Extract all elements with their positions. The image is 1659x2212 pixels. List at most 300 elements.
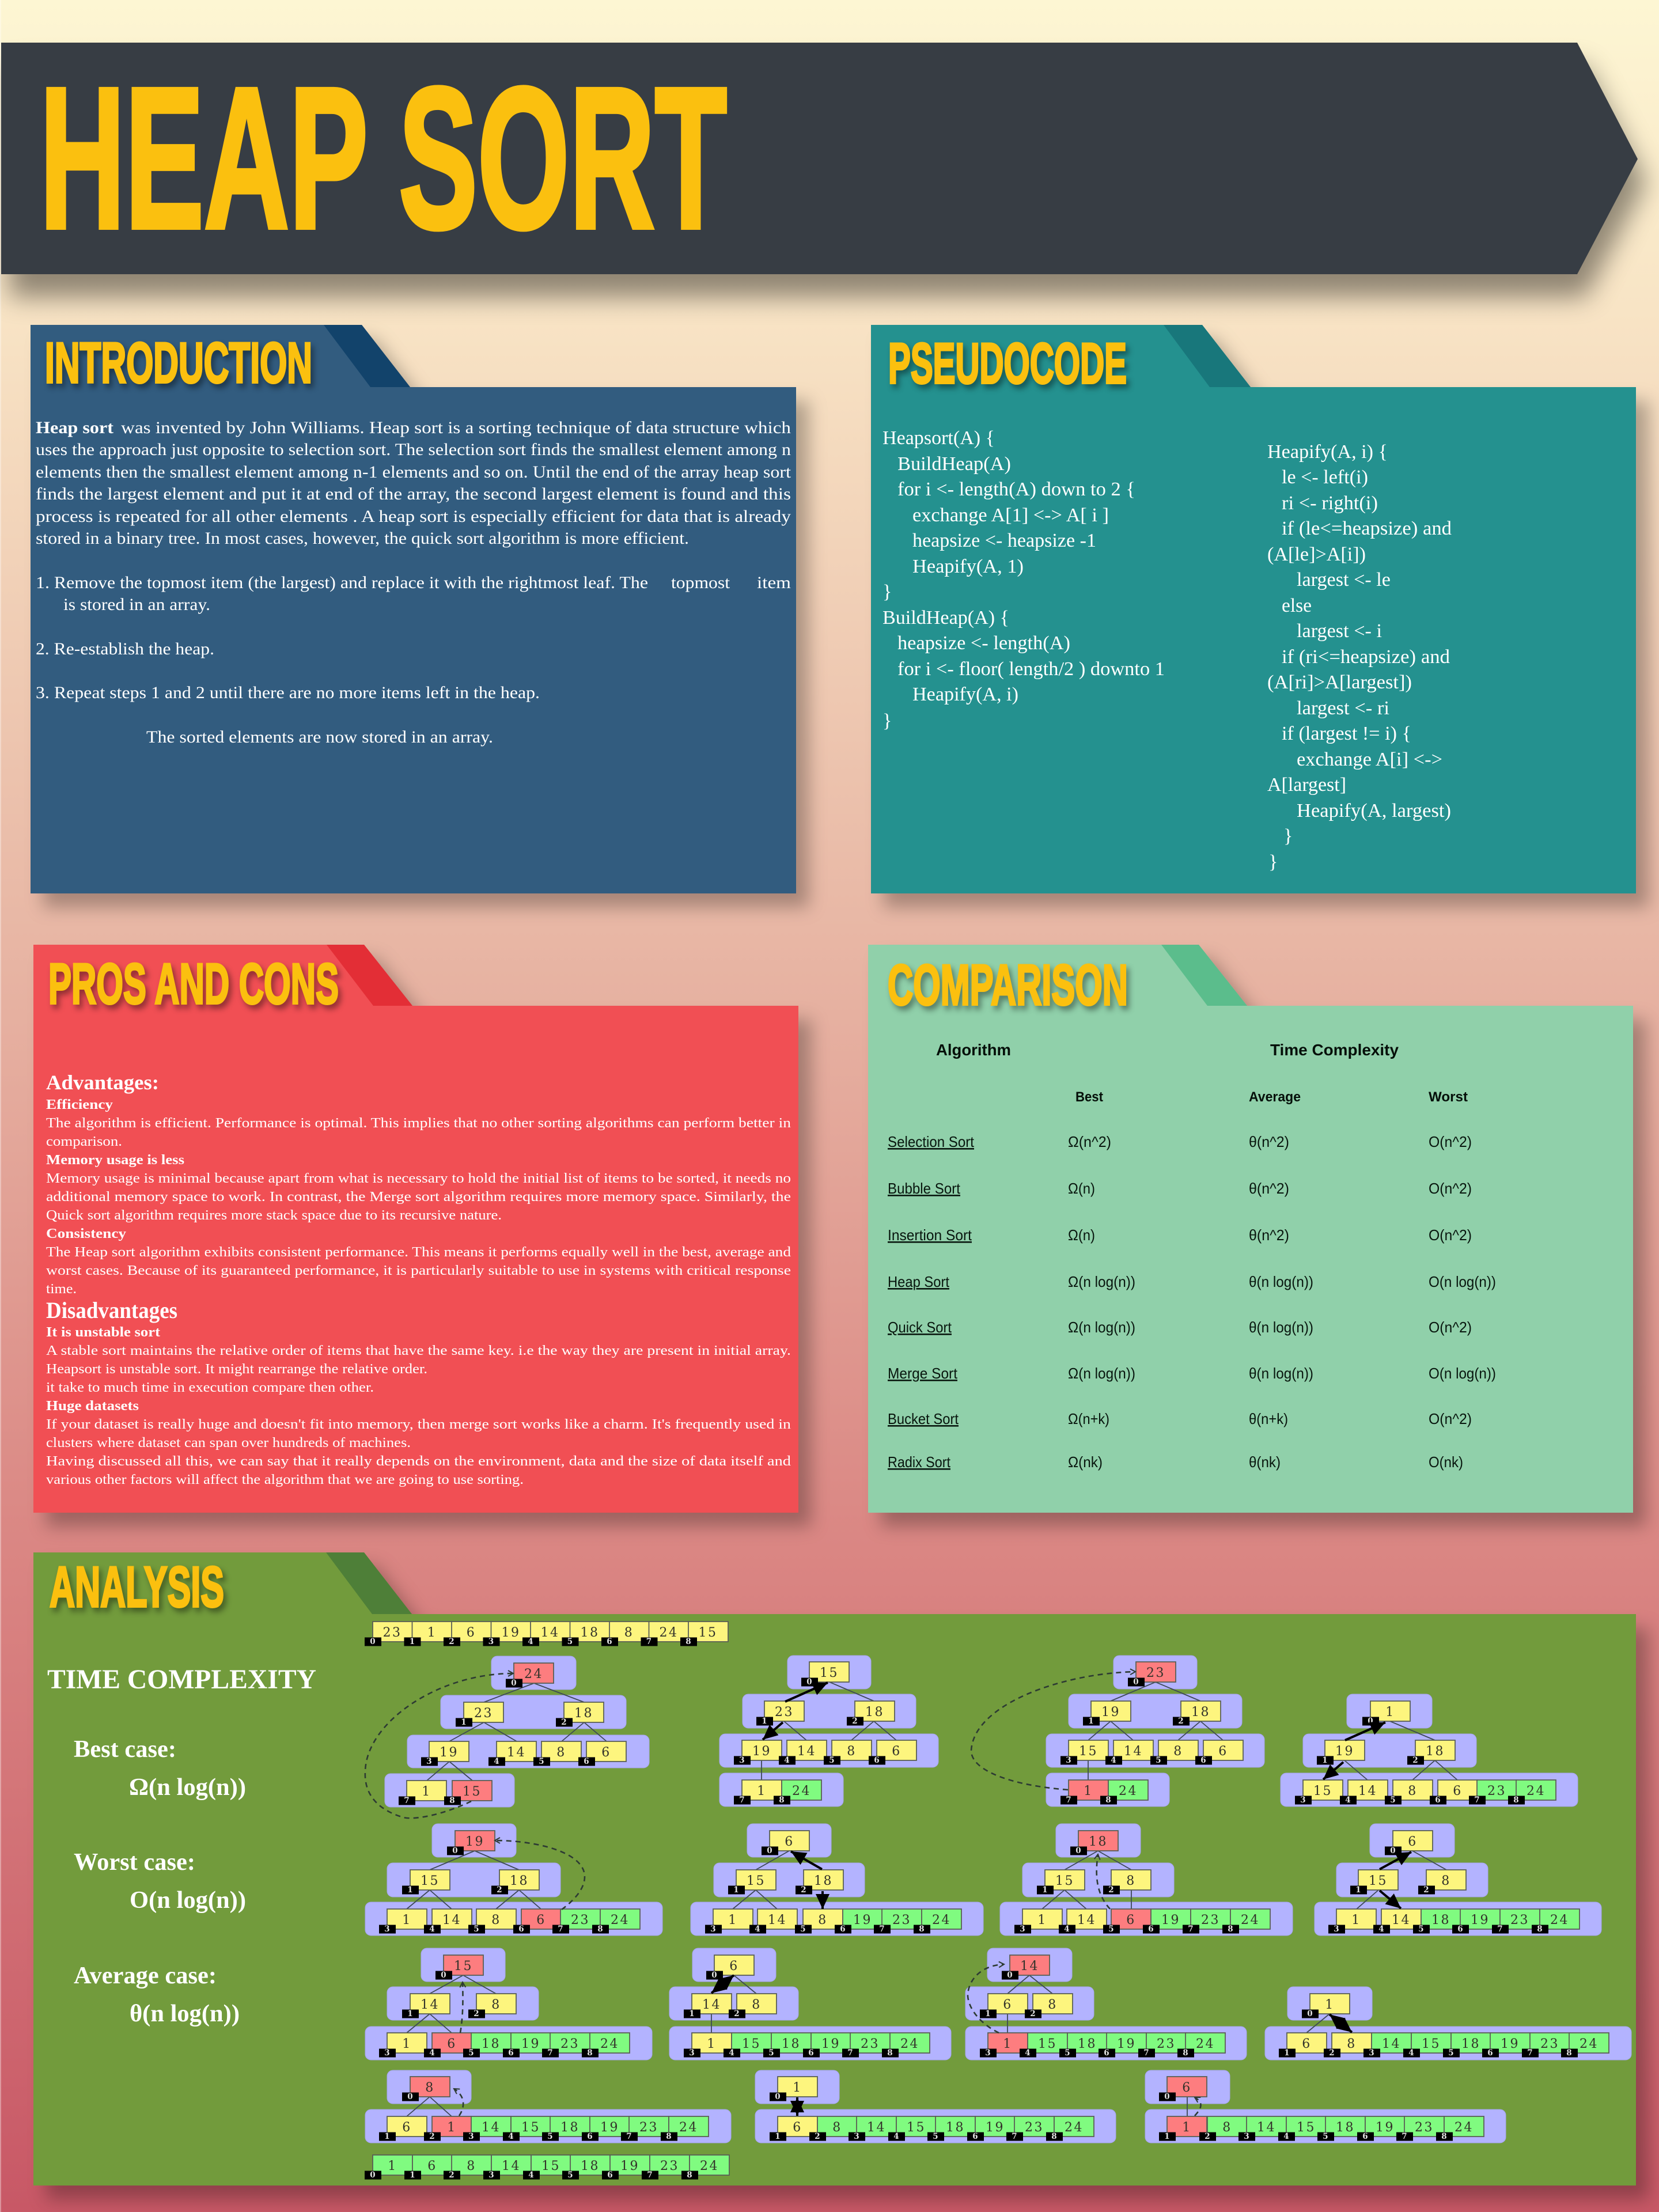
code: Heapify: largest <- i [1297, 620, 1382, 642]
heap diagram 3 [971, 1656, 1264, 1806]
code: Heapsort and BuildHeap: BuildHeap(A) { [882, 607, 1009, 628]
heap diagram 4: 3 [1300, 1796, 1306, 1805]
comparison table: Best [1075, 1089, 1103, 1105]
heap diagram 1: 7 [404, 1796, 410, 1805]
heap diagram 2: 19 [752, 1744, 771, 1759]
heap diagram 6 [691, 1824, 983, 1936]
heap diagram 6: 14 [768, 1913, 787, 1927]
heap diagram 8: 18 [1431, 1913, 1450, 1927]
heap diagram 10: 4 [729, 2048, 734, 2058]
heap diagram 7: 6 [1126, 1913, 1136, 1927]
heap diagram 9: 8 [491, 1998, 501, 2012]
heap diagram 15: 18 [1336, 2120, 1355, 2135]
heap diagram 8: 23 [1510, 1913, 1529, 1927]
comparison table: O(n^2) [1429, 1180, 1472, 1197]
heap diagram 11: 6 [1003, 1998, 1013, 2012]
input array: 1 [410, 1637, 415, 1646]
heap diagram 6: 5 [800, 1925, 806, 1934]
heap diagram 5: 4 [429, 1925, 435, 1934]
heap diagram 12: 8 [1347, 2037, 1357, 2051]
disadvantages text: Disadvantages [46, 1297, 177, 1323]
heap diagram 1: 19 [440, 1745, 459, 1760]
comparison table: Bucket Sort [888, 1410, 959, 1427]
heap diagram 11: 6 [1104, 2048, 1109, 2058]
heap diagram 12: 14 [1382, 2037, 1401, 2051]
heap diagram 7: 0 [1075, 1846, 1081, 1855]
heap diagram 9: 6 [508, 2048, 514, 2058]
heap diagram 6: 15 [747, 1874, 766, 1888]
heap diagram 3: 24 [1119, 1784, 1138, 1798]
heap diagram 14: 23 [1025, 2120, 1044, 2135]
heap diagram 14: 0 [775, 2092, 781, 2101]
introduction text: was invented by John Williams. Heap sort is a sorting technique of data structure which [121, 418, 791, 437]
introduction text: Heap sort [36, 418, 113, 437]
heap diagram 14: 1 [793, 2081, 802, 2095]
disadvantages text: It is unstable sort [46, 1324, 161, 1340]
heap diagram 13: 5 [547, 2132, 553, 2141]
title banner [1, 43, 1638, 274]
disadvantages text: Having discussed all this, we can say that it really depends on the environment, data and the size of data itself and [46, 1453, 791, 1469]
input array: 0 [370, 1637, 376, 1646]
heap diagram 6: 3 [710, 1925, 716, 1934]
heap diagram 4: 1 [1385, 1705, 1395, 1719]
heap diagram 5: 6 [536, 1913, 546, 1927]
heap diagram 6: 6 [840, 1925, 846, 1934]
heap diagram 5: 8 [491, 1913, 501, 1927]
comparison table: O(n^2) [1429, 1410, 1472, 1427]
sorted array: 6 [607, 2171, 613, 2180]
heap diagram 3: 8 [1105, 1796, 1111, 1805]
heap diagram 11: 1 [985, 2009, 991, 2018]
heap diagram 5: 19 [465, 1835, 484, 1849]
introduction text: process is repeated for all other elements . A heap sort is especially efficient for data that is already [36, 507, 791, 526]
heap diagram 1: 8 [449, 1796, 455, 1805]
advantages text: comparison. [46, 1134, 122, 1149]
advantages text: Consistency [46, 1226, 127, 1241]
heap diagram 7: 23 [1201, 1913, 1220, 1927]
heap diagram 7 [1000, 1824, 1293, 1936]
heap diagram 13: 14 [482, 2120, 501, 2135]
heap diagram 8: 8 [1441, 1874, 1451, 1888]
heap diagram 11: 14 [1020, 1959, 1039, 1974]
heap diagram 15: 2 [1205, 2132, 1210, 2141]
heap diagram 5: 6 [518, 1925, 524, 1934]
heap diagram 2: 14 [797, 1744, 816, 1759]
heap diagram 1: 2 [561, 1718, 567, 1727]
heap diagram 2: 23 [775, 1705, 794, 1719]
advantages text: Efficiency [46, 1097, 113, 1112]
heap diagram 14: 6 [972, 2132, 978, 2141]
heap diagram 8: 6 [1408, 1835, 1418, 1849]
heap diagram 6: 18 [814, 1874, 833, 1888]
heap diagram 2 [719, 1656, 938, 1806]
heap diagram 7: 3 [1020, 1925, 1025, 1934]
heap diagram 4: 19 [1335, 1744, 1354, 1759]
heap diagram 4: 2 [1412, 1756, 1418, 1765]
heap diagram 2: 18 [865, 1705, 884, 1719]
advantages text: Quick sort algorithm requires more stack space due to its recursive nature. [46, 1207, 502, 1223]
comparison table: Algorithm [936, 1041, 1011, 1059]
comparison table: Ω(n) [1068, 1180, 1095, 1197]
code: Heapify: if (le<=heapsize) and [1282, 518, 1452, 539]
code: Heapify: ri <- right(i) [1282, 493, 1378, 514]
banner arrow shape [1, 43, 1638, 274]
heap diagram 12: 0 [1307, 2009, 1313, 2018]
code: Heapify: Heapify(A, largest) [1297, 800, 1451, 821]
heap diagram 11: 0 [1007, 1971, 1013, 1980]
heap diagram 11: 4 [1025, 2048, 1031, 2058]
advantages text: The algorithm is efficient. Performance is optimal. This implies that no other sorting algorithms can perform better in [46, 1115, 791, 1131]
advantages text: time. [46, 1281, 77, 1297]
input array: 5 [567, 1637, 573, 1646]
heap diagram 10: 14 [702, 1998, 721, 2012]
heap diagram 4: 8 [1408, 1784, 1418, 1798]
comparison table: Insertion Sort [888, 1226, 972, 1244]
code: Heapsort and BuildHeap: heapsize <- length(A) [897, 632, 1070, 654]
heap diagram 9: 0 [441, 1971, 446, 1980]
heap diagram 13: 6 [587, 2132, 593, 2141]
code: Heapsort and BuildHeap: exchange A[1] <-> A[ i ] [912, 505, 1109, 526]
heap diagram 2: 1 [757, 1784, 767, 1798]
introduction text: elements then the smallest element among n-1 elements and so on. Until the end of the array heap sort [36, 463, 791, 482]
heap diagram 9: 6 [447, 2037, 457, 2051]
sorted array: 1 [410, 2171, 415, 2180]
heap diagram 10: 1 [707, 2037, 717, 2051]
heap diagram 6: 23 [892, 1913, 911, 1927]
heap diagram 6: 24 [932, 1913, 951, 1927]
code: Heapify: le <- left(i) [1282, 467, 1368, 488]
input array: 18 [581, 1626, 599, 1640]
heap diagram 5: 23 [571, 1913, 590, 1927]
time complexity text [47, 1664, 316, 2027]
heap diagram 7: 5 [1108, 1925, 1114, 1934]
heap diagram 12: 19 [1501, 2037, 1520, 2051]
comparison table: Average [1249, 1089, 1301, 1105]
heap diagram 7: 7 [1188, 1925, 1194, 1934]
heap diagram 3: 18 [1191, 1705, 1210, 1719]
heap diagram 9: 5 [468, 2048, 474, 2058]
heap diagram 11: 1 [1003, 2037, 1013, 2051]
heap diagram 4: 4 [1345, 1796, 1351, 1805]
heap diagram 3: 3 [1066, 1756, 1071, 1765]
heap diagram 9: 23 [560, 2037, 579, 2051]
sorted array: 7 [647, 2171, 653, 2180]
disadvantages text: it take to much time in execution compare then other. [46, 1380, 374, 1395]
code: Heapify: largest <- le [1297, 569, 1391, 590]
heap diagram 10: 1 [689, 2009, 695, 2018]
code: Heapsort and BuildHeap: } [882, 710, 892, 732]
sorted array: 8 [687, 2171, 692, 2180]
heap diagram 3: 2 [1178, 1717, 1184, 1726]
disadvantages text: If your dataset is really huge and doesn't fit into memory, then merge sort works like a charm. It's frequently used in [46, 1416, 791, 1432]
heap diagram 5: 0 [452, 1846, 458, 1855]
introduction panel shape [31, 325, 796, 893]
heap diagram 3: 4 [1111, 1756, 1116, 1765]
heap diagram 6: 0 [767, 1846, 772, 1855]
heap diagram 13: 2 [429, 2132, 435, 2141]
heap diagram 5: 24 [611, 1913, 630, 1927]
sorted array: 5 [567, 2171, 573, 2180]
analysis panel shape [33, 1552, 1636, 2186]
sorted array: 23 [660, 2159, 679, 2173]
heap diagram 7: 4 [1064, 1925, 1070, 1934]
heap diagram 12: 18 [1461, 2037, 1480, 2051]
heap diagram 3: 14 [1124, 1744, 1143, 1759]
heap diagram 11: 5 [1065, 2048, 1070, 2058]
comparison table: O(n log(n)) [1429, 1365, 1496, 1382]
heap diagram 3: 1 [1084, 1784, 1093, 1798]
pros and cons heading: PROS AND CONS [48, 952, 339, 1016]
heap diagram 10: 18 [782, 2037, 801, 2051]
heap diagram 10 [669, 1948, 951, 2060]
heap diagram 1: 6 [584, 1757, 589, 1766]
heap diagram 7: 15 [1055, 1874, 1074, 1888]
advantages text: Advantages: [46, 1071, 159, 1094]
code: Heapify: exchange A[i] <-> [1297, 749, 1442, 770]
heap diagram 12: 6 [1302, 2037, 1312, 2051]
heap diagram 12: 23 [1540, 2037, 1559, 2051]
heap diagram 2: 7 [739, 1796, 745, 1805]
panel: introduction [31, 325, 796, 893]
heap diagram 14: 4 [893, 2132, 899, 2141]
code: Heapsort and BuildHeap [882, 427, 1165, 732]
heap diagram 9: 15 [454, 1959, 473, 1974]
heap diagram 2: 8 [779, 1796, 785, 1805]
heap diagram 1: 15 [463, 1785, 482, 1799]
comparison table: θ(n log(n)) [1249, 1365, 1313, 1382]
panel: analysis [33, 1552, 1636, 2186]
heap diagram 12 [1265, 1987, 1631, 2060]
code: Heapify: (A[le]>A[i]) [1267, 544, 1366, 565]
heap diagram 11: 23 [1157, 2037, 1176, 2051]
heap diagram 1: 3 [426, 1757, 432, 1766]
heap diagram 13: 19 [600, 2120, 619, 2135]
introduction heading: INTRODUCTION [45, 331, 312, 395]
heap diagram 4: 23 [1487, 1784, 1506, 1798]
heap diagram 11: 19 [1117, 2037, 1136, 2051]
code: Heapsort and BuildHeap: } [882, 581, 892, 603]
heap diagram 2: 3 [739, 1756, 745, 1765]
heap diagram 2: 15 [820, 1666, 839, 1680]
heap diagram 4: 7 [1474, 1796, 1480, 1805]
heap diagram 4: 24 [1527, 1784, 1546, 1798]
sorted array: 3 [488, 2171, 494, 2180]
heap diagram 8: 2 [1423, 1885, 1429, 1895]
code: Heapify [1267, 441, 1452, 873]
heap diagram 7: 18 [1089, 1835, 1108, 1849]
heap diagram 12: 7 [1527, 2048, 1533, 2058]
heap diagram 3: 15 [1079, 1744, 1098, 1759]
heap diagram 15: 5 [1323, 2132, 1328, 2141]
sorted array: 6 [427, 2159, 437, 2173]
advantages text: additional memory space to work. In contrast, the Merge sort algorithm requires more memory space. Similarly, the [46, 1189, 791, 1205]
heap diagram 11: 2 [1030, 2009, 1036, 2018]
time complexity text: Average case: [74, 1963, 217, 1989]
pseudocode panel shape [871, 325, 1636, 893]
heap diagram 7: 1 [1037, 1913, 1047, 1927]
sorted array: 18 [581, 2159, 600, 2173]
heap diagram 13: 1 [384, 2132, 390, 2141]
heap diagram 15: 6 [1362, 2132, 1368, 2141]
comparison table: O(n^2) [1429, 1133, 1472, 1150]
comparison table: θ(n^2) [1249, 1226, 1289, 1244]
heap diagram 9: 4 [429, 2048, 435, 2058]
heap diagram 10: 8 [887, 2048, 893, 2058]
advantages text: Memory usage is less [46, 1152, 184, 1168]
heap diagram 8: 0 [1390, 1846, 1396, 1855]
heap diagram 14: 24 [1065, 2120, 1084, 2135]
heap diagram 6: 6 [785, 1835, 794, 1849]
heap diagram 2: 5 [829, 1756, 835, 1765]
code: Heapify: } [1283, 825, 1293, 847]
introduction text: uses the approach just opposite to selection sort. The selection sort finds the smallest element among n [36, 440, 791, 459]
heap diagram 15: 6 [1182, 2081, 1192, 2095]
code: Heapsort and BuildHeap: heapsize <- heapsize -1 [912, 530, 1096, 551]
comparison table: θ(n log(n)) [1249, 1273, 1313, 1290]
heap diagram 9: 7 [547, 2048, 553, 2058]
heap diagram 4: 5 [1390, 1796, 1396, 1805]
analysis heading: ANALYSIS [50, 1555, 224, 1619]
heap diagram 13: 24 [679, 2120, 698, 2135]
disadvantages text [46, 1297, 791, 1487]
heap diagram 9: 24 [600, 2037, 619, 2051]
heap diagram 10: 19 [821, 2037, 840, 2051]
sorted array: 14 [502, 2159, 521, 2173]
sorted array: 15 [541, 2159, 560, 2173]
pros and cons panel shape [33, 945, 798, 1513]
comparison table: Merge Sort [888, 1365, 958, 1382]
sorted array: 2 [449, 2171, 454, 2180]
code: Heapify: if (largest != i) { [1282, 723, 1411, 744]
comparison heading: COMPARISON [888, 953, 1128, 1017]
comparison table: θ(n^2) [1249, 1133, 1289, 1150]
heap diagram 4: 6 [1453, 1784, 1463, 1798]
heap diagram 1: 4 [494, 1757, 499, 1766]
heap diagram 15: 7 [1402, 2132, 1407, 2141]
sorted array: 0 [370, 2171, 376, 2180]
heap diagram 9: 3 [384, 2048, 390, 2058]
title: HEAP SORT [40, 46, 727, 270]
heap diagram 9: 2 [474, 2009, 479, 2018]
input array: 24 [659, 1626, 679, 1640]
comparison table: Heap Sort [888, 1273, 950, 1290]
heap diagram 12: 1 [1284, 2048, 1290, 2058]
heap diagram 9: 1 [407, 2009, 413, 2018]
input array: 23 [382, 1626, 402, 1640]
heap diagram 13: 7 [626, 2132, 632, 2141]
heap diagram 10: 15 [742, 2037, 761, 2051]
heap diagram 3: 5 [1156, 1756, 1161, 1765]
heap diagram 15: 0 [1164, 2092, 1170, 2101]
heap diagram 5: 18 [510, 1874, 529, 1888]
heap diagram 15: 15 [1297, 2120, 1316, 2135]
code: Heapify: A[largest] [1267, 774, 1346, 796]
heap diagram 12: 6 [1487, 2048, 1493, 2058]
heap diagram 4: 15 [1313, 1784, 1332, 1798]
heap diagram 3: 0 [1133, 1677, 1139, 1687]
heap diagram 6: 1 [728, 1913, 738, 1927]
heap diagram 6: 8 [919, 1925, 925, 1934]
heap diagram 3: 19 [1101, 1705, 1120, 1719]
code: Heapify: else [1282, 595, 1312, 616]
heap diagram 3: 7 [1066, 1796, 1071, 1805]
heap diagram 2: 4 [784, 1756, 790, 1765]
heap diagram 15: 3 [1244, 2132, 1249, 2141]
heap diagram 14: 2 [815, 2132, 820, 2141]
time complexity text: TIME COMPLEXITY [47, 1664, 316, 1695]
time complexity text: O(n log(n)) [130, 1887, 246, 1914]
heap diagram 2: 0 [806, 1677, 812, 1687]
sorted array: 19 [620, 2159, 639, 2173]
heap diagram 11: 18 [1078, 2037, 1097, 2051]
disadvantages text: Heapsort is unstable sort. It might rearrange the relative order. [46, 1361, 427, 1377]
heap diagram 11: 8 [1048, 1998, 1058, 2012]
heap diagram 15 [1145, 2070, 1506, 2143]
heap diagram 2: 6 [874, 1756, 880, 1765]
heap diagram 13: 1 [447, 2120, 457, 2135]
code: Heapify: (A[ri]>A[largest]) [1267, 672, 1412, 693]
heap diagram 3: 1 [1088, 1717, 1094, 1726]
panel: comparison [868, 945, 1633, 1513]
heap diagram 1: 8 [556, 1745, 566, 1760]
heap diagram 15: 19 [1376, 2120, 1395, 2135]
pseudocode heading: PSEUDOCODE [888, 331, 1127, 395]
heap diagram 14: 8 [1051, 2132, 1057, 2141]
heap diagram 15: 14 [1257, 2120, 1276, 2135]
heap diagram 11 [965, 1948, 1247, 2060]
panel: pros and cons [33, 945, 798, 1513]
heap diagram 1: 23 [474, 1706, 493, 1721]
advantages text: Memory usage is minimal because apart from what is necessary to hold the initial list of items to be sorted, it needs no [46, 1171, 791, 1186]
heap diagram 13: 18 [560, 2120, 579, 2135]
disadvantages text: clusters where dataset can span over hundreds of machines. [46, 1435, 411, 1450]
heap diagram 1: 6 [601, 1745, 611, 1760]
heap diagram 15: 8 [1441, 2132, 1447, 2141]
introduction text [36, 418, 791, 747]
comparison panel shape [868, 945, 1633, 1513]
comparison table: Selection Sort [888, 1133, 975, 1150]
heap diagram 11: 24 [1196, 2037, 1215, 2051]
heap diagram 12: 1 [1325, 1998, 1335, 2012]
heap diagram 13: 3 [468, 2132, 474, 2141]
disadvantages text: A stable sort maintains the relative order of items that have the same key. i.e the way they are present in initial array. [46, 1343, 791, 1358]
heap diagram 9: 8 [587, 2048, 593, 2058]
heap diagram 4 [1281, 1694, 1578, 1806]
advantages text: worst cases. Because of its guaranteed performance, it is particularly suitable to use in systems with critical response [46, 1263, 791, 1278]
heap diagram 15: 8 [1222, 2120, 1232, 2135]
heap diagram 11: 3 [985, 2048, 991, 2058]
heap diagram 6: 19 [853, 1913, 872, 1927]
heap diagram 10: 6 [729, 1959, 739, 1974]
introduction text: The sorted elements are now stored in an array. [146, 728, 493, 747]
heap diagram 2: 8 [847, 1744, 857, 1759]
sorted array: 24 [700, 2159, 719, 2173]
heap diagram 3: 23 [1146, 1666, 1165, 1680]
heap diagram 13: 15 [521, 2120, 540, 2135]
advantages text: The Heap sort algorithm exhibits consistent performance. This means it performs equally well in the best, average and [46, 1244, 791, 1260]
heap diagram 6: 1 [733, 1885, 739, 1895]
heap diagram 15: 23 [1415, 2120, 1434, 2135]
heap diagram 5 [365, 1824, 662, 1936]
heap diagram 8: 1 [1351, 1913, 1361, 1927]
heap diagram 1: 18 [574, 1706, 593, 1721]
input array: 6 [607, 1637, 612, 1646]
heap diagram 4: 1 [1322, 1756, 1328, 1765]
heap diagram 15: 1 [1182, 2120, 1192, 2135]
heap diagram 9: 18 [482, 2037, 501, 2051]
heap diagram 5: 15 [421, 1874, 440, 1888]
heap diagram 2: 1 [762, 1717, 767, 1726]
